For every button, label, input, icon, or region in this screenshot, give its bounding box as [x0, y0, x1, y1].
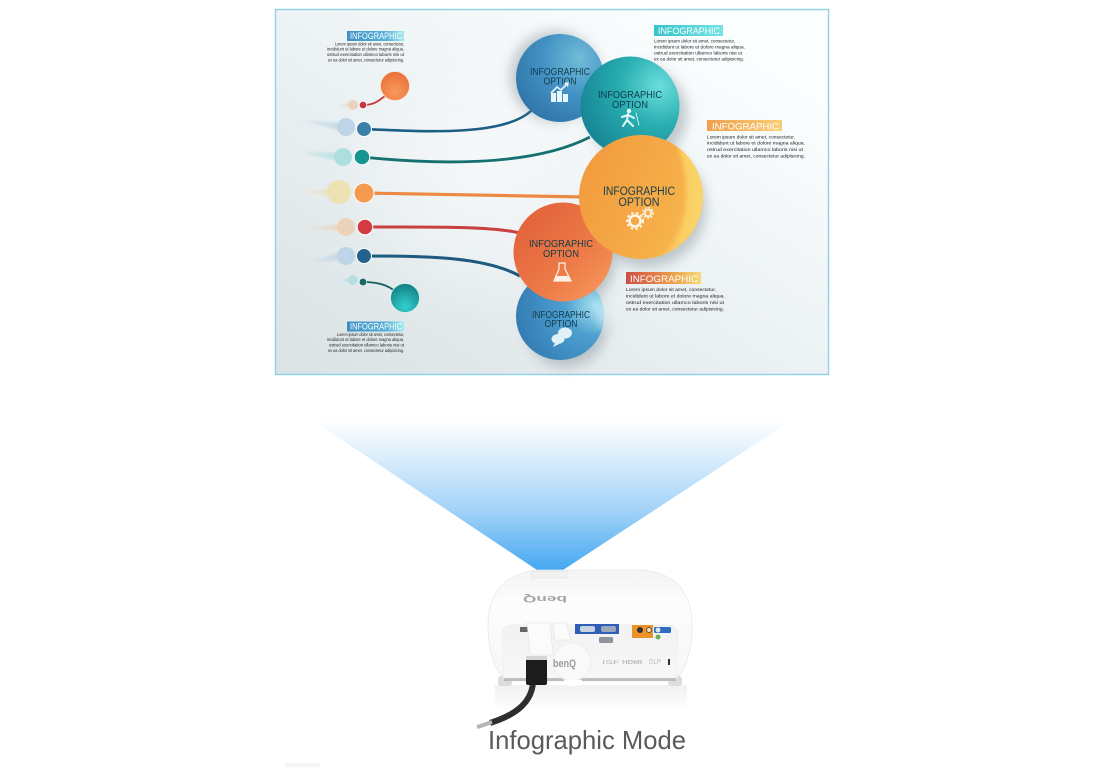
icon: flask [554, 263, 571, 281]
row 2: blue line [292, 110, 532, 136]
power cable and plug [477, 656, 547, 727]
sphere: top blue: OPTION [544, 76, 576, 88]
rear logos: ISF [602, 660, 620, 666]
text block: bottom left [327, 322, 405, 354]
sphere: teal: INFOGRAPHIC [598, 89, 662, 101]
port: orange audio block [632, 625, 653, 638]
rear logos: HDMI [622, 660, 643, 666]
projected screen panel [276, 10, 828, 374]
sphere: orange: OPTION [543, 248, 579, 260]
sphere: yellow [579, 135, 710, 262]
lens ghost and rear brand: benQ [553, 658, 576, 670]
port: blue and green audio [654, 627, 671, 640]
text block: top left: INFOGRAPHIC [350, 31, 402, 41]
sphere shadows [510, 31, 706, 367]
row 7: small teal dot to teal circle [337, 275, 420, 312]
text block: middle right [707, 120, 805, 160]
row 5: red line [298, 218, 520, 236]
text block: lower right: ostrud exercitation ullamco laboris nisi ut [626, 300, 725, 306]
rear panel [502, 625, 678, 680]
row 4: orange line [297, 180, 585, 204]
cable adapters [527, 623, 571, 655]
icon: gears [627, 208, 653, 229]
projector [477, 570, 692, 727]
text block: top left: Lorem ipsum dolor sit amet, consectetur, [335, 42, 404, 48]
text block: top left: ex ea dolor sit amet, consectetur adipisicing. [328, 58, 404, 64]
feet [498, 676, 682, 686]
text block: top right [654, 25, 745, 62]
row 3: teal line [290, 137, 590, 166]
sphere: yellow: OPTION [618, 197, 660, 209]
text block: top left [327, 31, 405, 64]
row 6: navy line [302, 247, 520, 276]
text block: lower right: incididunt ut labore et dolore magna aliqua. [626, 294, 725, 300]
sphere: orange: INFOGRAPHIC [529, 238, 593, 250]
caption: Infographic Mode [488, 725, 686, 755]
port: HDMI [520, 627, 531, 632]
sphere: top blue [516, 34, 604, 122]
text block: middle right: Lorem ipsum dolor sit amet, consectetur, [707, 134, 795, 140]
port: blue VGA block [575, 624, 619, 634]
text block: middle right: ostrud exercitation ullamco laboris nisi ut [707, 147, 804, 153]
sphere: teal: OPTION [612, 99, 648, 111]
icon: growth chart [551, 82, 569, 102]
sphere: teal [580, 56, 680, 156]
rear logos [602, 659, 661, 666]
sphere: yellow: INFOGRAPHIC [603, 186, 675, 198]
text block: bottom left: incididunt ut labore et dolore magna aliqua. [327, 337, 404, 343]
text block: top right: ostrud exercitation ullamco laboris nisi ut [654, 50, 743, 56]
icon: walking figure [622, 109, 639, 126]
sphere: bottom blue: INFOGRAPHIC [532, 309, 590, 321]
projection light cone [312, 420, 792, 570]
sphere: bottom blue: OPTION [544, 318, 578, 330]
brand on top: benQ [523, 594, 567, 604]
icon: speech bubbles [552, 328, 572, 347]
lock slot [668, 659, 670, 665]
row 1: small red dot to orange circle [336, 72, 410, 110]
text block: top left: ostrud exercitation ullamco laboris nisi ut [327, 52, 405, 58]
sphere: orange [514, 202, 612, 302]
text block: lower right: ex ea dolor sit amet, consectetur adipisicing. [626, 306, 724, 312]
text block: middle right: incididunt ut labore et dolore magna aliqua. [707, 140, 805, 146]
text block: top right: ex ea dolor sit amet, consectetur adipisicing. [654, 56, 744, 62]
text block: top left: incididunt ut labore et dolore magna aliqua, [327, 46, 404, 52]
faint bottom mark [285, 764, 320, 766]
floor reflection [495, 685, 687, 712]
text block: middle right: ex ea dolor sit amet, consectetur adipisicing. [707, 154, 805, 160]
text block: top right: INFOGRAPHIC [658, 26, 720, 36]
sphere: bottom blue [516, 272, 609, 360]
lens ghost and rear brand [553, 643, 591, 686]
top tab [531, 571, 568, 578]
text block: bottom left: Lorem ipsum dolor sit amet, consectetur, [337, 332, 404, 338]
text block: bottom left: ostrud exercitation ullamco laboris nisi ut [329, 342, 405, 348]
text block: lower right: INFOGRAPHIC [630, 274, 699, 284]
rear logos: DLP [649, 659, 661, 666]
text block: lower right: Lorem ipsum dolor sit amet, consectetur, [626, 287, 716, 293]
sphere: top blue: INFOGRAPHIC [530, 66, 590, 78]
left dots and connector lines [290, 72, 590, 312]
body shell [488, 570, 692, 681]
text block: bottom left: INFOGRAPHIC [350, 322, 402, 332]
text block: top right: Lorem ipsum dolor sit amet, consectetur, [654, 38, 735, 44]
text block: top right: incididunt ut labore et dolore magna aliqua. [654, 44, 745, 50]
port: grey serial [599, 637, 613, 643]
text block: bottom left: ex ea dolor sit amet, consectetur adipisicing. [328, 348, 404, 354]
text block: lower right [626, 272, 725, 312]
text block: middle right: INFOGRAPHIC [712, 122, 780, 132]
